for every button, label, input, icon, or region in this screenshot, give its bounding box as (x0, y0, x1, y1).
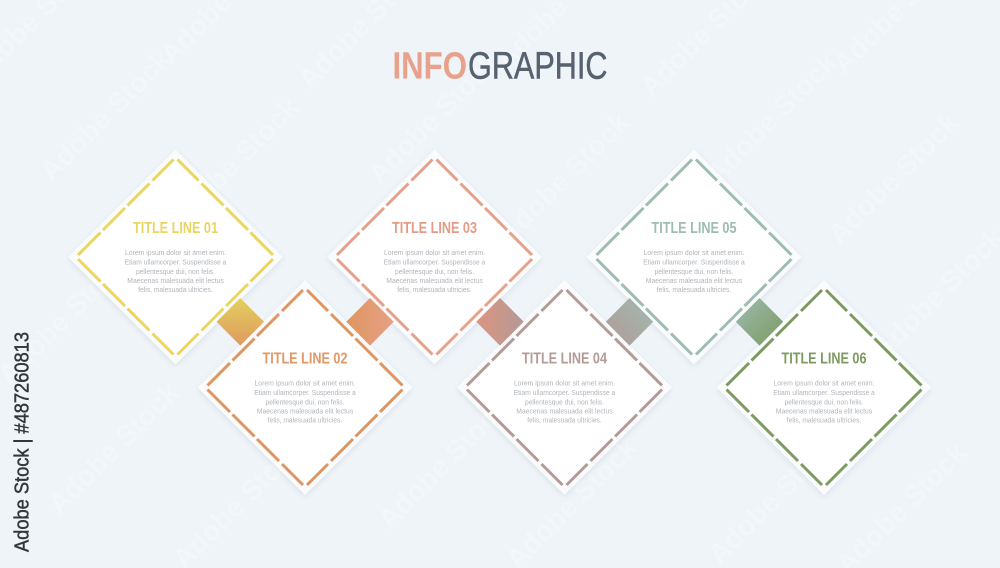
panel: title line 03: Lorem ipsum dolor sit amet enim. (384, 248, 485, 257)
panel: title line 06: TITLE LINE 06 (782, 350, 867, 367)
panel: title line 04: pellentesque dui, non felis. (525, 397, 604, 406)
panel: title line 04: Lorem ipsum dolor sit amet enim. (514, 379, 615, 388)
panel: title line 03 (327, 150, 542, 364)
panel: title line 01: felis, malesuada ultricies. (138, 285, 213, 294)
panel: title line 03: felis, malesuada ultricies. (397, 285, 472, 294)
panel: title line 06: Etiam ullamcorper. Suspendisse a (773, 388, 875, 397)
watermark pattern: Adobe Stock (700, 47, 843, 190)
watermark pattern: Adobe Stock (34, 44, 177, 187)
panel: title line 02: Maecenas malesuada elit lectus (257, 406, 354, 416)
panel: title line 05: felis, malesuada ultricies. (657, 285, 731, 294)
panel: title line 02 (198, 280, 412, 495)
panel: title line 03: pellentesque dui, non felis. (395, 267, 474, 276)
panel: title line 04: TITLE LINE 04 (522, 350, 607, 367)
connector 3 to 4 (476, 298, 524, 346)
panel: title line 01: Lorem ipsum dolor sit amet enim. (125, 248, 226, 257)
title: INFO (392, 46, 467, 88)
watermark pattern: Adobe Stock (42, 377, 185, 520)
watermark pattern: Adobe Stock (822, 107, 965, 250)
panel: title line 03: TITLE LINE 03 (392, 220, 477, 237)
panel: title line 05: Lorem ipsum dolor sit amet enim. (644, 248, 744, 257)
panel: title line 03: Etiam ullamcorper. Suspendisse a (384, 258, 485, 266)
panel: title line 05: pellentesque dui, non felis. (654, 267, 734, 276)
connector 5 to 6 (736, 298, 783, 346)
panel: title line 05: Etiam ullamcorper. Suspendisse a (643, 258, 745, 266)
panel: title line 04: Maecenas malesuada elit lectus (516, 406, 613, 416)
stock id label: Adobe Stock | #487260813 (12, 332, 34, 552)
connector squares (217, 298, 783, 346)
panel: title line 04: Etiam ullamcorper. Suspendisse a (514, 388, 615, 397)
panel: title line 01: pellentesque dui, non felis. (136, 267, 215, 276)
panel: title line 03: Maecenas malesuada elit lectus (386, 276, 483, 285)
watermark pattern: Adobe Stock (702, 427, 845, 568)
connector 2 to 3 (346, 298, 394, 346)
connector 4 to 5 (606, 298, 653, 346)
panel: title line 05 (586, 150, 802, 364)
panel: title line 02: felis, malesuada ultricies. (268, 416, 342, 425)
panel: title line 05: Maecenas malesuada elit lectus (646, 276, 743, 285)
panel: title line 06: Maecenas malesuada elit lectus (776, 406, 873, 416)
watermark pattern: Adobe Stock (372, 392, 515, 535)
panel: title line 02: Etiam ullamcorper. Suspendisse a (254, 388, 356, 397)
connector 1 to 2 (217, 298, 264, 346)
panel: title line 06 (716, 280, 932, 495)
title (392, 46, 608, 88)
watermark pattern: Adobe Stock (362, 47, 505, 190)
panel: title line 05: TITLE LINE 05 (652, 220, 737, 237)
panel: title line 01: TITLE LINE 01 (133, 220, 218, 237)
panel: title line 01: Maecenas malesuada elit lectus (127, 276, 224, 285)
panel: title line 04 (457, 280, 672, 495)
panel: title line 02: TITLE LINE 02 (262, 350, 348, 367)
panel: title line 01 (68, 150, 283, 364)
watermark pattern: Adobe Stock (492, 107, 635, 250)
panel: title line 02: Lorem ipsum dolor sit amet enim. (254, 379, 356, 388)
panel: title line 06: felis, malesuada ultricies. (787, 416, 861, 425)
watermark pattern: Adobe Stock (162, 92, 305, 235)
panel: title line 01: Etiam ullamcorper. Suspendisse a (125, 258, 226, 266)
panel: title line 06: pellentesque dui, non felis. (784, 397, 864, 406)
panel: title line 04: felis, malesuada ultricies. (527, 416, 602, 425)
panel: title line 02: pellentesque dui, non felis. (266, 397, 344, 406)
title: GRAPHIC (468, 46, 608, 88)
panel: title line 06: Lorem ipsum dolor sit amet enim. (774, 379, 874, 388)
